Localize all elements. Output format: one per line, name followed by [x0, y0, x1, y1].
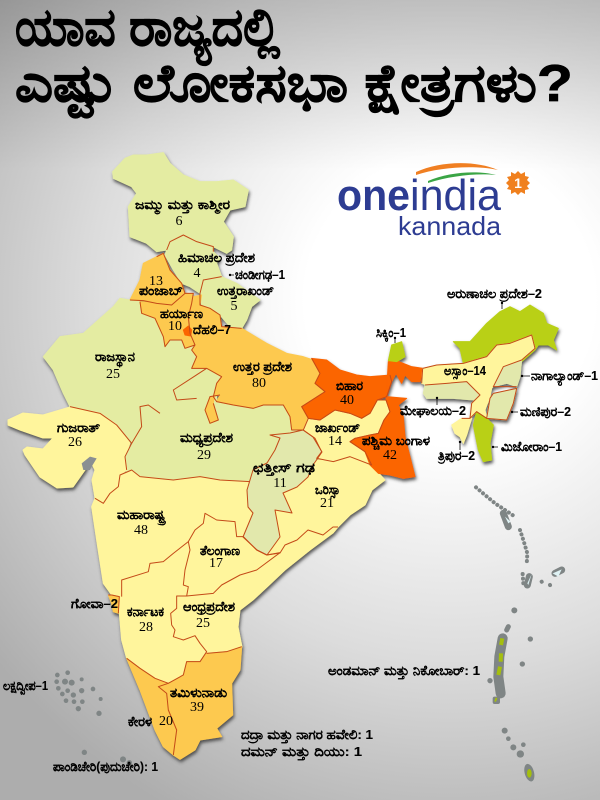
state labels and seat counts: ಮಹಾರಾಷ್ಟ್ರ	[117, 507, 166, 526]
state labels and seat counts: ತೆಲಂಗಾಣ	[200, 543, 240, 558]
state: Tripura	[452, 418, 472, 443]
state labels and seat counts: ತಮಿಳುನಾಡು	[170, 685, 227, 700]
state labels and seat counts: 11	[273, 476, 287, 491]
state: Andhra Pradesh	[171, 527, 338, 653]
state labels and seat counts: 4	[194, 266, 200, 281]
state: Sikkim	[388, 342, 405, 362]
state labels and seat counts: ಚಂಡೀಗಢ–1	[235, 267, 285, 282]
state labels and seat counts: ಮಧ್ಯಪ್ರದೇಶ	[180, 430, 233, 448]
state labels and seat counts: 29	[197, 448, 211, 463]
state: Delhi	[183, 326, 192, 336]
title	[15, 0, 573, 119]
title: ಎಷ್ಟು ಲೋಕಸಭಾ ಕ್ಷೇತ್ರಗಳು?	[15, 55, 573, 119]
state labels and seat counts: 39	[190, 700, 204, 715]
state: Haryana	[140, 293, 195, 348]
state labels and seat counts: ಹರ್ಯಾಣ	[160, 306, 203, 321]
Lakshadweep and Puducherry islands	[54, 670, 132, 765]
state labels and seat counts: 25	[106, 367, 120, 382]
logo: oneindia kannada: kannada	[398, 211, 502, 241]
state labels and seat counts: ಪಂಜಾಬ್	[139, 283, 183, 298]
state labels and seat counts: ಅರುಣಾಚಲ ಪ್ರದೇಶ–2	[447, 286, 542, 303]
state labels and seat counts: ಆಂಧ್ರಪ್ರದೇಶ	[183, 599, 235, 616]
state labels and seat counts: ಮಣಿಪುರ–2	[520, 404, 571, 419]
state: Meghalaya	[423, 382, 480, 400]
state: Manipur	[487, 388, 517, 420]
state: Goa	[108, 595, 119, 613]
leader lines	[229, 274, 530, 450]
state: Odisha	[267, 457, 385, 555]
state labels and seat counts: ದಮನ್ ಮತ್ತು ದಿಯು: 1	[241, 744, 362, 760]
state labels and seat counts: 80	[252, 376, 266, 391]
state: Mizoram	[473, 412, 493, 462]
state: Tamil Nadu	[158, 647, 242, 759]
state: Telangana	[183, 513, 280, 596]
state labels and seat counts: 26	[68, 435, 82, 450]
state: Punjab	[130, 253, 185, 305]
state labels and seat counts: ಕೇರಳ	[128, 714, 152, 729]
state labels and seat counts: ಗೋವಾ–2	[71, 596, 118, 611]
state labels and seat counts: ಸಿಕ್ಕಿಂ–1	[376, 325, 406, 342]
state labels and seat counts: ಗುಜರಾತ್	[57, 420, 100, 435]
state: Nagaland	[493, 360, 522, 387]
state labels and seat counts: 13	[149, 274, 163, 289]
state labels and seat counts: ಜಾರ್ಖಂಡ್	[315, 420, 360, 435]
state labels and seat counts: 28	[139, 620, 153, 635]
state labels and seat counts: 42	[383, 448, 397, 463]
title: ಯಾವ ರಾಜ್ಯದಲ್ಲಿ	[15, 0, 280, 67]
state labels and seat counts: ಛತ್ತೀಸ್ ಗಢ	[253, 460, 315, 476]
state labels and seat counts: 21	[320, 496, 334, 511]
state labels and seat counts: ಅಸ್ಸಾಂ–14	[444, 363, 487, 381]
state labels and seat counts: 17	[209, 556, 223, 571]
state labels and seat counts: ರಾಜಸ್ಥಾನ	[95, 349, 135, 368]
state: Jammu and Kashmir	[113, 153, 248, 253]
internal state borders	[70, 235, 535, 755]
state labels and seat counts: ಉತ್ತರ ಪ್ರದೇಶ	[233, 359, 292, 376]
state labels and seat counts: ಬಿಹಾರ	[336, 378, 363, 393]
state: Bihar	[302, 358, 392, 420]
state labels and seat counts: 20	[159, 714, 173, 729]
logo: oneindia kannada	[337, 163, 530, 241]
state labels and seat counts: ಕರ್ನಾಟಕ	[127, 604, 164, 619]
map of India	[8, 153, 558, 759]
state labels and seat counts: ಮಿಜೋರಾಂ–1	[501, 439, 562, 454]
state labels and seat counts: 48	[134, 523, 148, 538]
gulf of Khambhat water	[82, 457, 97, 470]
state: Maharashtra	[92, 470, 253, 597]
state labels and seat counts: ಜಮ್ಮು ಮತ್ತು ಕಾಶ್ಮೀರ	[135, 197, 230, 215]
state: Madhya Pradesh	[125, 368, 317, 513]
state labels and seat counts	[3, 197, 598, 774]
state labels and seat counts: ಅಂಡಮಾನ್ ಮತ್ತು ನಿಕೋಬಾರ್: 1	[328, 663, 480, 679]
state labels and seat counts: 14	[328, 434, 342, 449]
logo: oneindia kannada: india	[410, 171, 502, 220]
state labels and seat counts: ಹಿಮಾಚಲ ಪ್ರದೇಶ	[178, 250, 255, 267]
state: Uttarakhand	[200, 277, 260, 328]
state labels and seat counts: ಒರಿಸ್ಸಾ	[315, 482, 340, 500]
state labels and seat counts: ಉತ್ತರಾಖಂಡ್	[217, 283, 274, 299]
state labels and seat counts: ದೆಹಲಿ–7	[193, 322, 231, 337]
logo: oneindia kannada: one	[337, 171, 410, 220]
state labels and seat counts: ತ್ರಿಪುರ–2	[438, 448, 475, 465]
state: Himachal Pradesh	[165, 235, 222, 293]
state labels and seat counts: 40	[340, 393, 354, 408]
state labels and seat counts: 10	[168, 319, 182, 334]
state: Chhattisgarh	[243, 430, 322, 555]
state: Assam	[422, 335, 535, 418]
state: Arunachal Pradesh	[453, 305, 558, 363]
Andaman and Nicobar islands	[476, 487, 562, 783]
state: Karnataka	[118, 542, 207, 683]
state labels and seat counts: ನಾಗಾಲ್ಯಾಂಡ್–1	[531, 368, 598, 387]
state labels and seat counts: 25	[196, 616, 210, 631]
state: West Bengal	[350, 361, 423, 478]
logo: oneindia kannada: 1	[514, 175, 522, 191]
state labels and seat counts: 6	[176, 214, 182, 229]
state labels and seat counts: ಲಕ್ಷದ್ವೀಪ–1	[3, 678, 48, 695]
state labels and seat counts: 5	[230, 299, 238, 314]
state: Jharkhand	[303, 400, 390, 465]
state labels and seat counts: ಪಾಂಡಿಚೇರಿ(ಪುದುಚೇರಿ): 1	[53, 759, 158, 774]
state: Uttar Pradesh	[188, 295, 325, 430]
state: Rajasthan	[43, 298, 207, 443]
state labels and seat counts: ಮೇಘಾಲಯ–2	[400, 403, 466, 418]
state labels and seat counts: ದದ್ರಾ ಮತ್ತು ನಾಗರ ಹವೇಲಿ: 1	[241, 727, 373, 745]
state labels and seat counts: ಪಶ್ಚಿಮ ಬಂಗಾಳ	[362, 433, 430, 451]
state: Kerala	[127, 658, 177, 755]
state: Gujarat	[8, 407, 130, 503]
